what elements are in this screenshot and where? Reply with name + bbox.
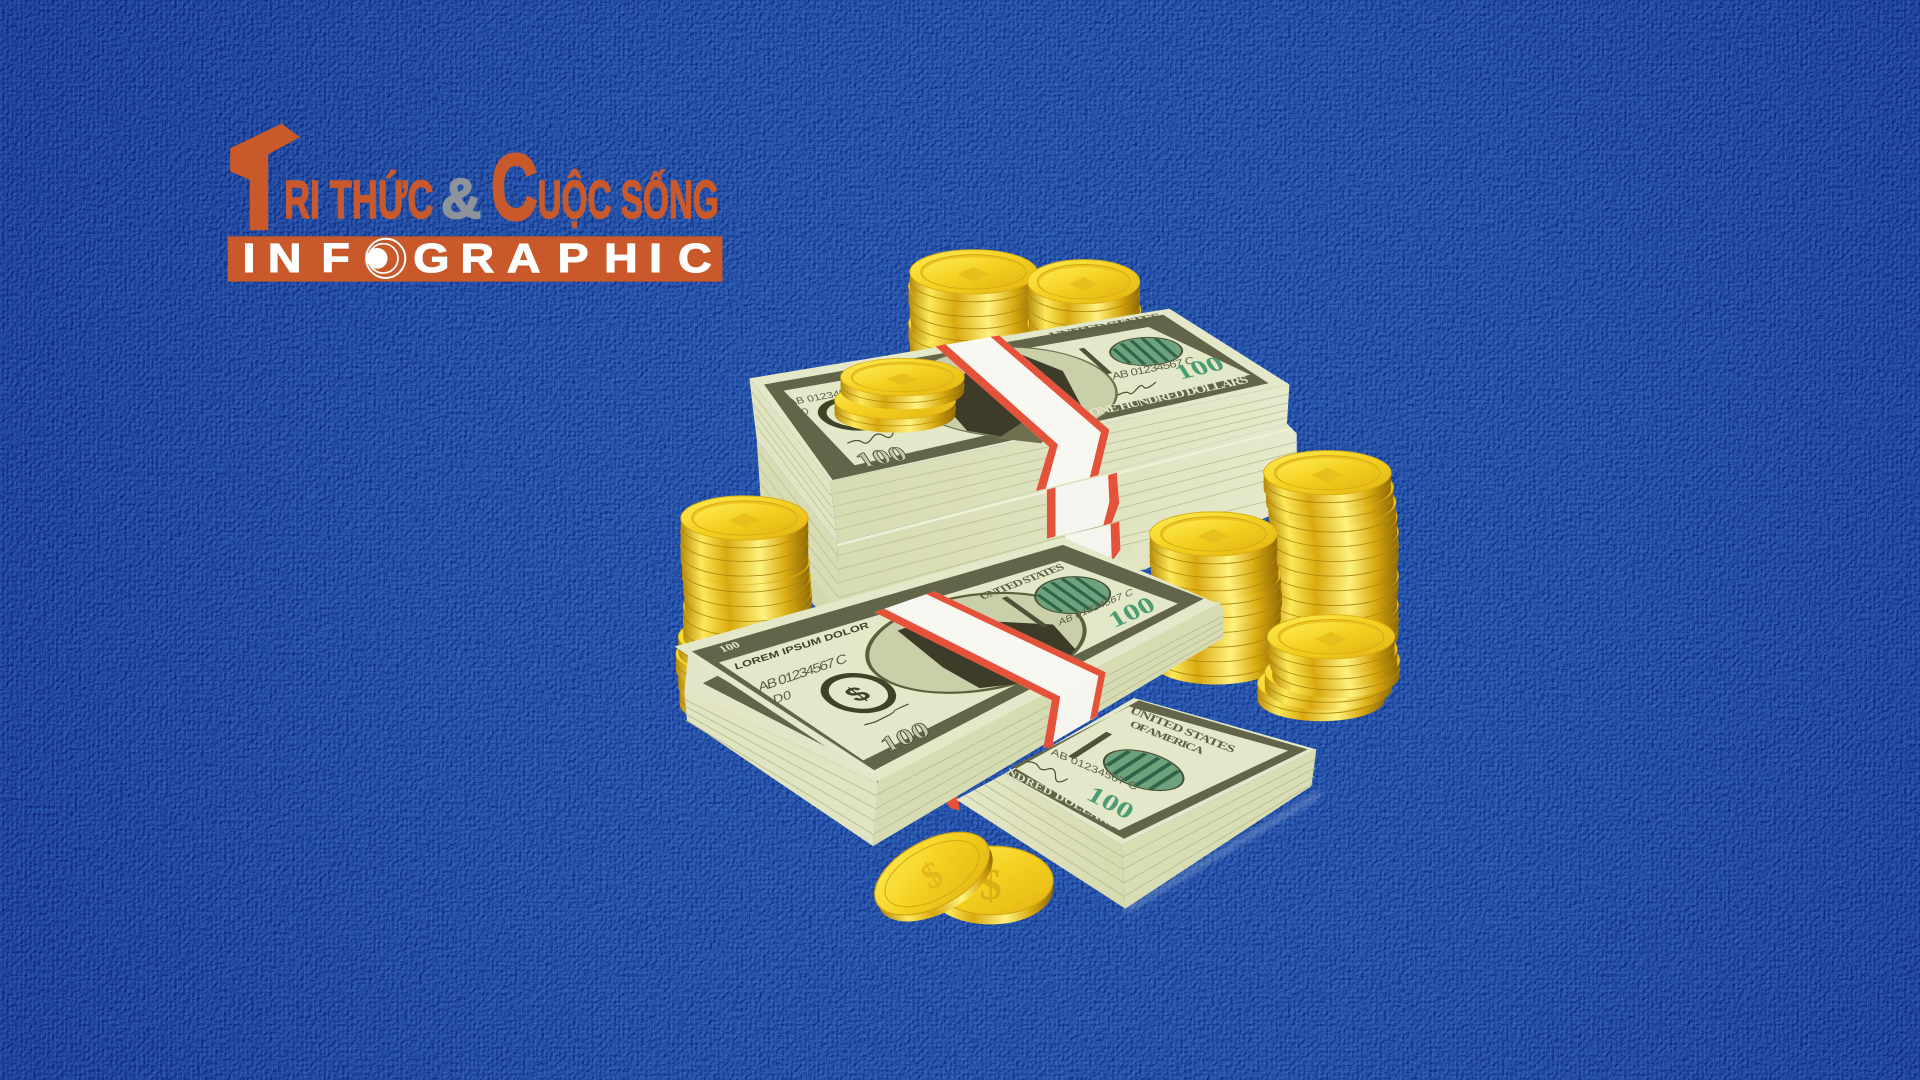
bill texts: front stack: LOREM IPSUM DOLOR	[733, 621, 870, 672]
banknote stack: front right	[945, 698, 1320, 911]
bill texts: front stack: AB 01234567 C	[1058, 587, 1134, 628]
bill texts: front stack: D0	[772, 688, 792, 707]
coin stack: back left	[909, 250, 1038, 373]
logo: roof-shaped letter T	[230, 124, 300, 230]
coin: tilted: $	[914, 852, 950, 897]
band lower segment	[1065, 523, 1120, 566]
red band sliver	[945, 793, 960, 811]
loose gold coins	[861, 815, 1053, 939]
bill texts: upper stack: UNITED STATES	[1046, 312, 1166, 340]
coin: flat: $	[980, 860, 1002, 909]
bill texts: front stack: OF AMERICA	[1128, 718, 1206, 757]
logo: Tri Thức wordmark: RI THỨC	[284, 170, 433, 230]
coin: flat	[928, 846, 1053, 924]
banknote stack: front centre with band	[675, 538, 1223, 846]
icon: treasury seal	[811, 395, 899, 433]
stack layer: middle	[757, 424, 1297, 611]
soft shadow glow	[1125, 793, 1320, 911]
bill texts: front stack: UNITED STATES	[976, 561, 1067, 602]
icon: green hatched 100	[1081, 333, 1193, 374]
stack surface under lifted sheet	[684, 655, 878, 784]
paper band: front stack	[874, 591, 1106, 748]
icon: green hatched 100	[1004, 569, 1124, 627]
logo: infographic banner	[228, 236, 722, 282]
bill texts: upper stack: 100	[1170, 352, 1229, 384]
logo: ampersand: &	[441, 167, 481, 230]
bill texts: front stack: 100	[1082, 782, 1139, 825]
logo: infographic banner: GRAPHIC	[413, 237, 712, 281]
bill frame	[1007, 700, 1308, 839]
bill texts: upper stack: ONE HUNDRED DOLLARS	[1086, 373, 1251, 419]
icon: concentric ring O	[366, 239, 405, 278]
bill texts: front stack	[1006, 704, 1238, 830]
coin stack: back right	[1028, 260, 1141, 361]
coins resting on the banknotes	[835, 358, 964, 433]
signature	[1117, 382, 1156, 396]
coin stack: left	[676, 496, 812, 726]
bill texts: front stack: AB 01234567 C	[1050, 746, 1138, 793]
bill frame	[692, 545, 1204, 770]
logo: Tri Thức & Cuộc Sống Infographic	[228, 124, 722, 282]
stack layer: top sides	[749, 378, 1289, 544]
bill texts: upper stack: 100	[851, 442, 913, 473]
bill texts: upper stack: AB 01234567 C	[787, 383, 873, 408]
coin stack: middle right	[1150, 512, 1282, 684]
coin stack: tall right	[1264, 451, 1398, 687]
bill texts: front stack	[716, 561, 1160, 758]
icon: green hatched 100	[1071, 733, 1198, 799]
bill texts: front stack: 100	[716, 639, 743, 655]
bill texts: upper stack: AB 01234567 C	[1111, 355, 1196, 382]
logo: large letter C: C	[491, 135, 538, 239]
icon: dollar seal: $	[838, 683, 879, 706]
signature	[864, 704, 909, 725]
signature	[1026, 762, 1068, 782]
portrait oval	[829, 572, 1123, 713]
bill texts: front stack: 100	[876, 717, 935, 758]
bill texts: upper stack: D0	[792, 406, 811, 419]
bill texts: front stack: AB 01234567 C	[757, 652, 848, 695]
coin: tilted	[861, 815, 1006, 939]
bill texts: front stack: 100	[1103, 591, 1160, 632]
stack layer: bottom	[762, 471, 1276, 624]
bill texts: upper stack	[787, 312, 1251, 473]
logo: infographic banner: INF	[242, 237, 350, 281]
logo: Cuộc Sống wordmark: UỘC SỐNG	[538, 169, 719, 230]
icon: dollar seal	[811, 669, 906, 718]
coin stack: front right	[1258, 615, 1400, 721]
banknote stack: large upper stack	[749, 309, 1297, 624]
bill texts: front stack: UNITED STATES	[1128, 704, 1238, 755]
bill texts: front stack: NDRED DOLLARS	[1006, 766, 1118, 830]
paper band: upper stack	[936, 336, 1120, 566]
band top segment	[936, 336, 1109, 491]
banknote face: top of upper stack	[749, 309, 1289, 481]
signature	[847, 424, 911, 443]
bill frame	[764, 315, 1269, 480]
illustration: money and gold coins	[675, 250, 1400, 939]
portrait oval	[871, 333, 1152, 451]
band middle segment	[1047, 473, 1119, 539]
